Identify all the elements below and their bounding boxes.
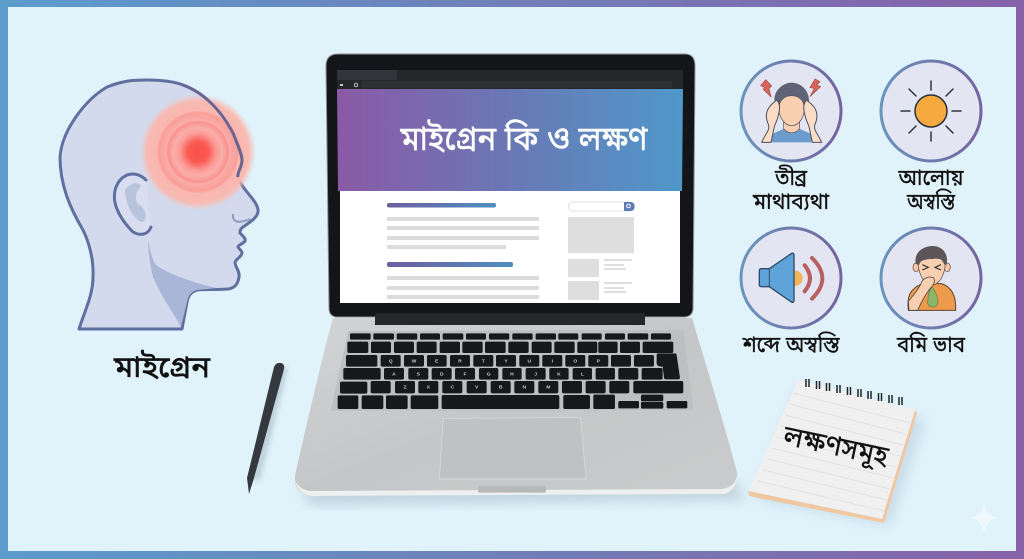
key legends: R xyxy=(458,359,462,365)
key legends: T xyxy=(482,359,485,365)
laptop base xyxy=(295,318,737,496)
icon: nausea person xyxy=(881,228,981,328)
banner title: মাইগ্রেন কি ও লক্ষণ xyxy=(400,119,648,158)
sun rays xyxy=(901,81,961,141)
hinge xyxy=(375,313,645,325)
key legends: Q xyxy=(389,359,393,365)
notepad title: লক্ষণসমূহ xyxy=(780,419,892,473)
forehead outline over rings xyxy=(183,85,242,177)
sparkle watermark xyxy=(970,503,998,533)
search box xyxy=(568,202,634,211)
keyboard xyxy=(331,330,693,493)
hair xyxy=(915,246,947,265)
icon: headache xyxy=(741,61,841,161)
hand and arm xyxy=(908,277,934,310)
neck shadow xyxy=(148,240,217,327)
trackpad xyxy=(439,418,586,479)
key legends: I xyxy=(552,359,554,365)
keys xyxy=(338,333,687,409)
hair xyxy=(774,83,809,108)
web banner xyxy=(337,89,683,191)
key legends: E xyxy=(435,359,439,365)
body xyxy=(908,284,956,310)
key legends: B xyxy=(499,385,503,391)
speaker cone xyxy=(759,253,794,302)
screen page xyxy=(340,189,680,303)
icon: speaker xyxy=(741,228,841,328)
sidebar item 2 xyxy=(568,281,632,300)
sun disc xyxy=(915,95,947,127)
article text lines 2 xyxy=(387,276,539,299)
key legends: C xyxy=(451,385,455,391)
shirt xyxy=(771,129,812,142)
face xyxy=(918,259,945,285)
pen xyxy=(247,363,284,494)
key legends: J xyxy=(534,372,537,378)
ears xyxy=(913,263,919,272)
key legends: A xyxy=(392,372,396,378)
pen shadow xyxy=(256,368,284,480)
spiral binding xyxy=(806,379,902,405)
article heading bar 2 xyxy=(387,262,513,267)
label: light discomfort: আলোয় xyxy=(898,165,964,190)
laptop shadow xyxy=(300,480,745,505)
lightning bolts xyxy=(761,80,772,97)
label: light discomfort xyxy=(898,165,964,214)
key legends: U xyxy=(528,359,532,365)
key legends: H xyxy=(510,372,514,378)
right hand and arm xyxy=(804,100,822,142)
key legends: Z xyxy=(403,385,407,391)
neck xyxy=(784,120,800,133)
key legends: G xyxy=(487,372,491,378)
article heading bar 1 xyxy=(387,203,496,208)
laptop lid xyxy=(326,54,695,317)
notepad page xyxy=(749,380,915,519)
laptop xyxy=(295,54,745,505)
label: severe headache xyxy=(752,165,830,214)
ruled lines xyxy=(758,393,910,511)
left hand and arm xyxy=(762,100,780,142)
sidebar item 1 xyxy=(568,259,632,277)
notepad edge xyxy=(748,410,917,523)
pain rings xyxy=(140,94,256,210)
head illustration xyxy=(60,80,258,329)
pen body xyxy=(247,363,284,494)
screen xyxy=(337,89,683,303)
key legends: F xyxy=(463,372,467,378)
vomit xyxy=(928,287,938,307)
icon: sun xyxy=(881,61,981,161)
sound waves xyxy=(805,265,810,291)
label: nausea: বমি ভাব xyxy=(896,332,966,357)
key legends: V xyxy=(475,385,479,391)
key legends: M xyxy=(546,385,550,391)
label: sound discomfort: শব্দে অস্বস্তি xyxy=(742,332,840,357)
key legends: W xyxy=(412,359,417,365)
key legends xyxy=(389,359,601,391)
squinting eyes xyxy=(922,265,941,270)
label: severe headache: মাথাব্যথা xyxy=(752,189,830,214)
browser chrome xyxy=(337,70,683,89)
key legends: L xyxy=(581,372,584,378)
key legends: N xyxy=(523,385,527,391)
lid notch xyxy=(478,486,546,493)
speaker dome xyxy=(787,271,803,286)
notepad xyxy=(748,379,925,525)
key legends: D xyxy=(440,372,444,378)
key legends: S xyxy=(417,372,421,378)
base front edge xyxy=(295,476,737,496)
notepad shadow xyxy=(755,385,925,525)
key legends: Y xyxy=(504,359,508,365)
key legends: O xyxy=(573,359,577,365)
label: light discomfort: অস্বস্তি xyxy=(906,189,956,214)
nostril xyxy=(233,214,250,222)
key legends: X xyxy=(427,385,431,391)
article text lines 1 xyxy=(387,217,539,249)
keyboard well xyxy=(331,330,693,411)
sidebar image xyxy=(568,217,634,253)
key legends: P xyxy=(597,359,601,365)
head silhouette xyxy=(60,80,258,329)
ear xyxy=(114,174,151,234)
key legends: K xyxy=(557,372,561,378)
label: migraine: মাইগ্রেন xyxy=(113,349,211,384)
face xyxy=(779,96,804,126)
label: severe headache: তীব্র xyxy=(774,165,808,190)
